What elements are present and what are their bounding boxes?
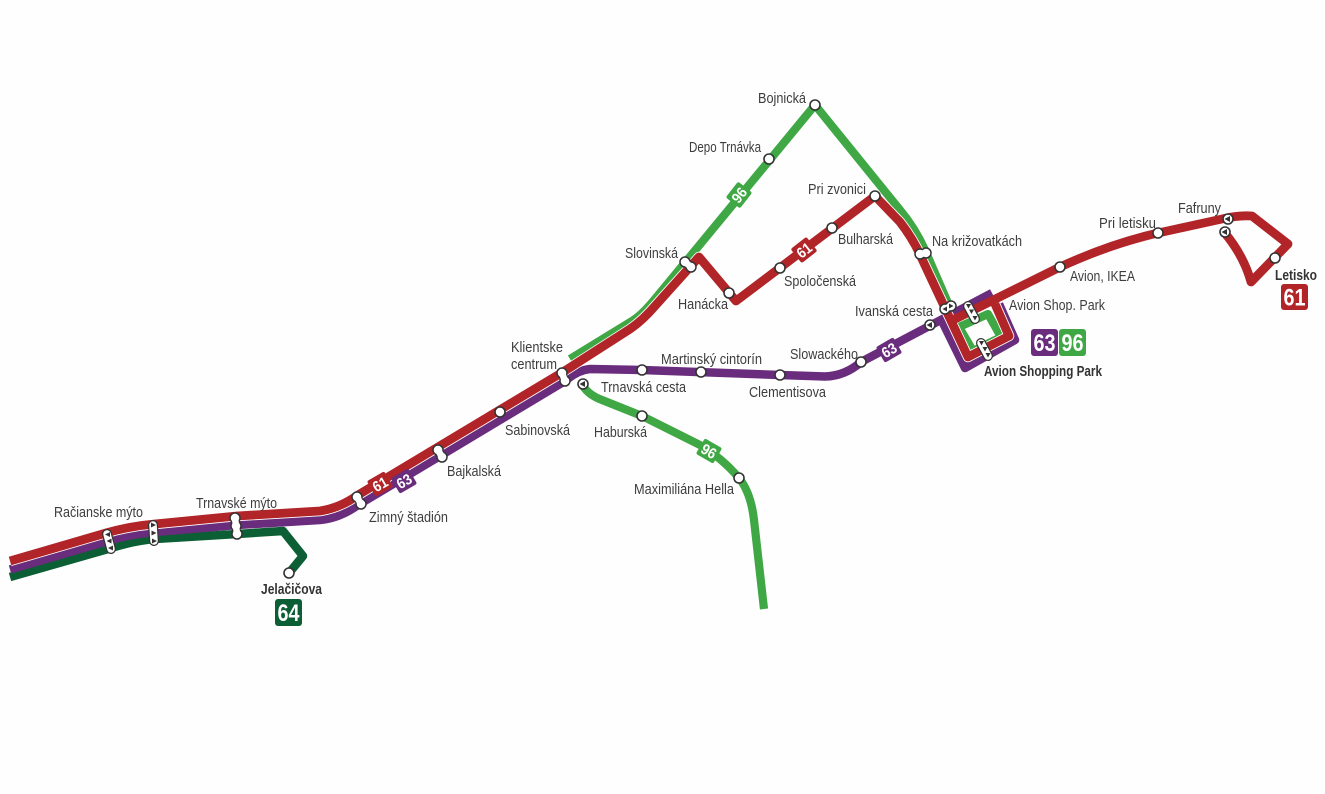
station labels: Haburská — [594, 424, 648, 441]
station labels: Jelačičova — [261, 581, 323, 598]
station labels: Trnavská cesta — [601, 379, 687, 396]
station labels: Slovinská — [625, 245, 679, 262]
line 96 loop — [959, 314, 1001, 351]
terminal badge 64: 64 — [278, 600, 300, 627]
line 96 route north — [570, 105, 948, 359]
route badge 61 Bulharska: 61 — [793, 239, 816, 262]
route badge 96 south: 96 — [698, 441, 719, 463]
station labels: Clementisova — [749, 384, 827, 401]
station labels: Sabinovská — [505, 422, 571, 439]
station labels: Zimný štadión — [369, 509, 448, 526]
terminal badge 96: 96 — [1062, 330, 1084, 357]
stations — [105, 100, 1280, 578]
route badge 96 north: 96 — [728, 184, 751, 207]
station labels: Na križovatkách — [932, 233, 1022, 250]
station labels: Martinský cintorín — [661, 351, 762, 368]
line 64 route — [10, 531, 303, 577]
station labels: Avion Shopping Park — [984, 363, 1103, 380]
station labels: Ivanská cesta — [855, 303, 934, 320]
station labels: Depo Trnávka — [689, 139, 762, 156]
station labels: Pri letisku — [1099, 215, 1156, 232]
station labels: Pri zvonici — [808, 181, 866, 198]
route badge 63 trunk: 63 — [394, 471, 415, 493]
route badge 61 trunk: 61 — [370, 474, 391, 496]
station labels: Bajkalská — [447, 463, 502, 480]
station labels: Maximiliána Hella — [634, 481, 735, 498]
line 63 route — [10, 293, 1015, 570]
route badge 63 Slowackeho: 63 — [879, 340, 900, 362]
terminal badge 61: 61 — [1284, 284, 1306, 312]
station labels: Slowackého — [790, 346, 858, 363]
station labels: Spoločenská — [784, 273, 857, 290]
station labels — [54, 90, 1317, 598]
station labels: Fafruny — [1178, 200, 1221, 217]
station labels: Avion, IKEA — [1070, 268, 1135, 285]
station labels: Avion Shop. Park — [1009, 297, 1105, 314]
line 96 route south — [581, 382, 764, 609]
station labels: Hanácka — [678, 296, 729, 313]
line 61 route — [10, 196, 1288, 561]
line 61 route casing — [10, 196, 1009, 561]
station labels: Bulharská — [838, 231, 894, 248]
station labels: Trnavské mýto — [196, 495, 277, 512]
station labels: Klientske — [511, 339, 563, 356]
station labels: centrum — [511, 356, 557, 373]
station labels: Račianske mýto — [54, 504, 143, 521]
station labels: Bojnická — [758, 90, 807, 107]
terminal badge 63: 63 — [1034, 330, 1056, 357]
